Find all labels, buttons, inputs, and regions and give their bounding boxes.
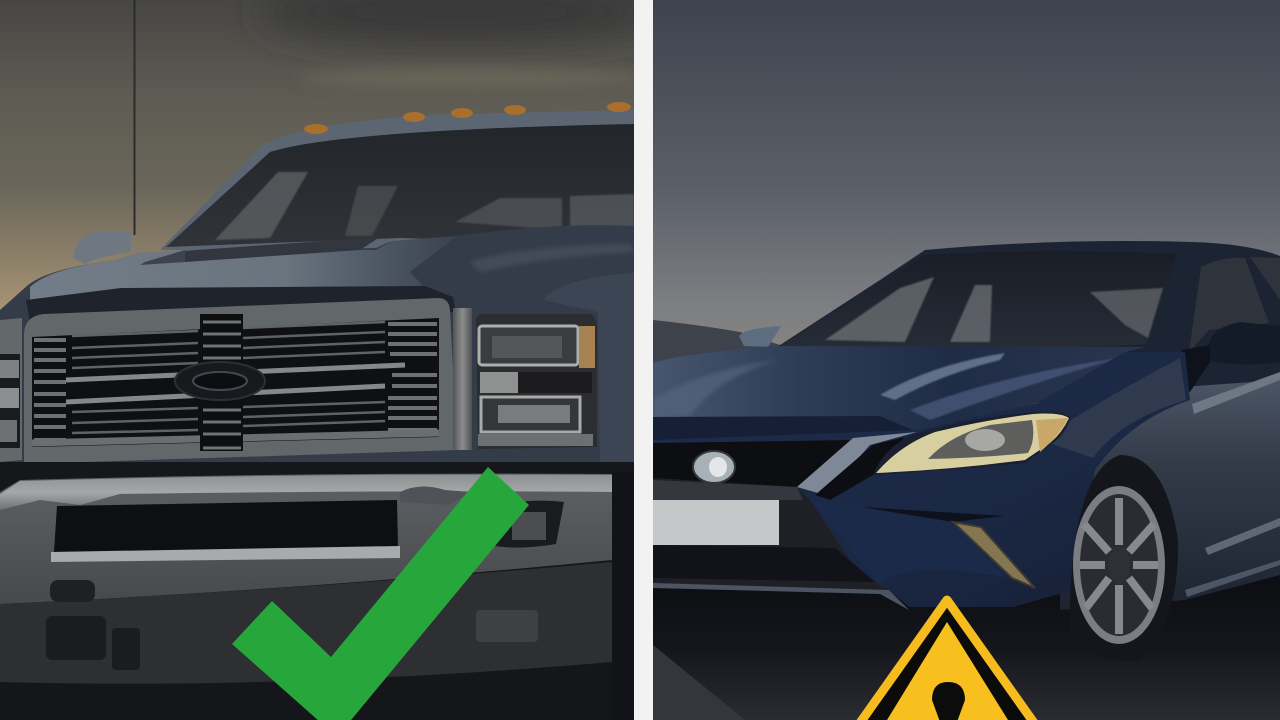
license plate bbox=[653, 500, 779, 545]
sedan side mirrors bbox=[739, 322, 1280, 392]
sedan side body bbox=[1060, 380, 1280, 610]
grille bbox=[24, 298, 457, 464]
grille emblem bbox=[175, 362, 265, 400]
sedan headlight bbox=[873, 412, 1071, 475]
sedan fog light bbox=[953, 522, 1035, 588]
panel: sedan bbox=[653, 0, 1280, 720]
sedan hood bbox=[653, 346, 1145, 443]
sedan lower grille bbox=[653, 432, 1005, 610]
icon: warning triangle bbox=[850, 600, 1044, 720]
truck front bumper bbox=[0, 462, 634, 720]
cab marker lights bbox=[304, 102, 631, 134]
sedan wheel bbox=[1070, 455, 1178, 661]
sedan roof and windows bbox=[777, 241, 1280, 400]
distant hill bbox=[653, 320, 780, 363]
left edge grille bbox=[0, 318, 22, 462]
sedan fender highlight bbox=[1040, 358, 1186, 458]
truck cab and windshield bbox=[160, 110, 634, 250]
panel divider bbox=[634, 0, 653, 720]
road bbox=[653, 575, 1280, 720]
grille slats bbox=[72, 322, 385, 433]
sedan emblem bbox=[693, 451, 735, 483]
truck hood bbox=[0, 225, 634, 470]
side mirror bbox=[73, 231, 131, 264]
icon: green check mark bbox=[232, 467, 529, 720]
sedan front body bbox=[653, 352, 1190, 607]
left sky bbox=[0, 0, 634, 310]
right sky bbox=[653, 0, 1280, 380]
sedan reflections on side bbox=[1185, 372, 1280, 597]
truck headlight bbox=[453, 308, 597, 450]
panel: pickup truck bbox=[0, 0, 660, 720]
